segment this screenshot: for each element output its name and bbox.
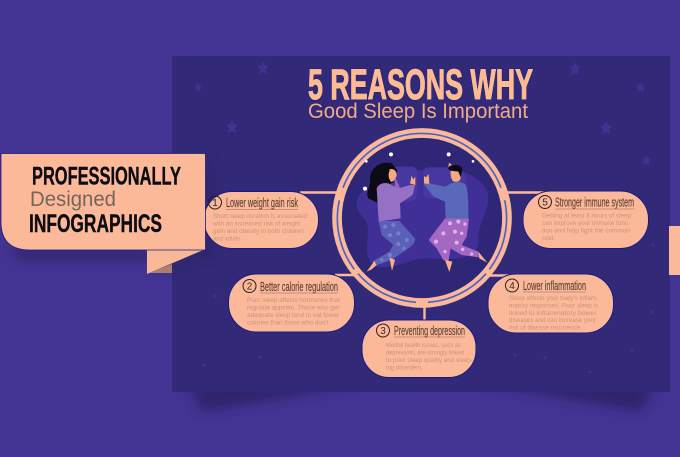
title: 5 REASONS WHY	[308, 61, 533, 109]
pill 4: lower inflammation: linked to inflammatory bowel	[509, 310, 597, 317]
main dark panel	[172, 56, 670, 392]
legs	[373, 221, 415, 266]
pill 1: lower weight gain risk: and adults.	[213, 236, 242, 242]
blue ring segments	[337, 133, 507, 302]
hair	[367, 163, 397, 204]
pill 2: better calorie regulation: Poor sleep affects hormones that	[247, 297, 340, 304]
pill 4: lower inflammation: risk of disease recurrence.	[509, 324, 582, 332]
head	[451, 170, 461, 182]
pill 3: preventing depression: depression, are strongly linked	[386, 350, 464, 356]
background stars	[194, 61, 654, 374]
pill 5: stronger immune system: 5	[542, 198, 548, 208]
man	[423, 163, 487, 272]
torso	[423, 182, 468, 219]
pill 4: lower inflammation: Sleep affects your body's inflam-	[509, 295, 598, 302]
connector lines	[300, 192, 545, 325]
title	[308, 61, 533, 123]
bed blob	[357, 168, 488, 267]
pill 4: lower inflammation: diseases and can increase your	[509, 317, 597, 324]
pill 1: lower weight gain risk: gain and obesity in both children	[213, 228, 304, 235]
pill 1: lower weight gain risk	[204, 192, 318, 248]
hand	[424, 174, 429, 184]
hand	[410, 176, 415, 185]
torso	[377, 183, 415, 222]
pillows	[387, 167, 417, 202]
banner: professionally designed infographics: PROFESSIONALLY	[32, 162, 181, 190]
woman	[367, 163, 415, 272]
pill 4: lower inflammation: Lower inflammation	[523, 278, 586, 293]
pillow arm	[395, 177, 402, 192]
pill 1: lower weight gain risk: 1	[212, 198, 218, 209]
pill 3: preventing depression: Mental health issues, such as	[386, 342, 462, 349]
pill 2: better calorie regulation: calories than those who don't.	[247, 320, 330, 326]
pill 5: stronger immune system: tion and help fight the common	[542, 228, 630, 234]
face	[389, 169, 397, 182]
pill 3: preventing depression: ing disorders.	[386, 364, 423, 372]
banner: professionally designed infographics: INFOGRAPHICS	[29, 210, 162, 238]
banner shadow	[8, 160, 214, 272]
banner: professionally designed infographics: Designed	[30, 188, 116, 211]
pill 3: preventing depression: 3	[380, 326, 386, 337]
feet	[445, 252, 487, 272]
pill 2: better calorie regulation: regulate appetite. Those who get	[247, 304, 339, 312]
pill 3: preventing depression	[362, 320, 476, 378]
sparkles	[363, 152, 474, 191]
panel shadow	[188, 382, 658, 412]
banner ribbon tail	[147, 249, 206, 274]
pill 1: lower weight gain risk: with an increased risk of weight	[212, 220, 300, 228]
pill 4: lower inflammation	[488, 274, 614, 333]
pill 2: better calorie regulation: 2	[247, 282, 253, 292]
pill 2: better calorie regulation	[228, 274, 354, 332]
pill 2: better calorie regulation: Better calorie regulation	[260, 279, 338, 294]
banner: professionally designed infographics	[1, 154, 206, 250]
legs	[429, 218, 479, 262]
pill 3: preventing depression: to poor sleep quality and sleep-	[386, 357, 473, 364]
pill 3: preventing depression: Preventing depression	[394, 323, 465, 338]
pill 4: lower inflammation: 4	[509, 281, 515, 292]
pill 1: lower weight gain risk: Short sleep duration is associated	[213, 213, 307, 220]
feet	[367, 257, 395, 272]
pill 5: stronger immune system: can improve your immune func-	[542, 220, 630, 227]
pill 1: lower weight gain risk: Lower weight gain risk	[226, 195, 298, 210]
pill 5: stronger immune system: cold.	[542, 235, 555, 242]
pill 4: lower inflammation: matory responses. Poor sleep is	[509, 302, 599, 310]
subtitle: Good Sleep Is Important	[308, 100, 528, 123]
pill 2: better calorie regulation: adequate sleep tend to eat fewer	[247, 312, 340, 319]
pill 5: stronger immune system: Getting at least 8 hours of sleep	[542, 212, 631, 220]
right edge tab	[669, 226, 680, 275]
pill 5: stronger immune system	[523, 191, 648, 248]
central ring with sleeping couple	[337, 133, 507, 303]
ring disc	[338, 134, 506, 302]
